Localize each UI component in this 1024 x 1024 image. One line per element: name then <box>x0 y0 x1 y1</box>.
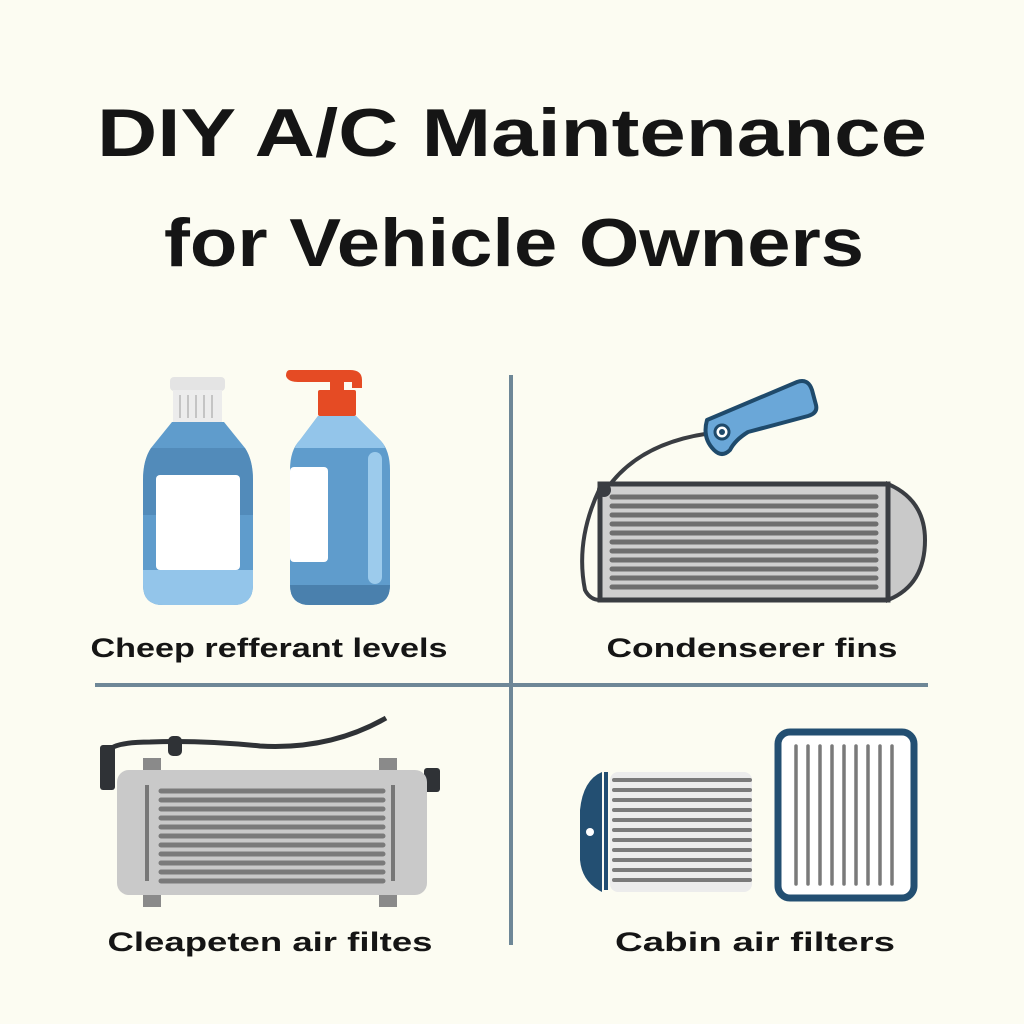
label: cabin filters: Cabin air filters <box>615 927 895 957</box>
icon: radiator body <box>100 745 440 907</box>
panel: radiator <box>100 718 440 907</box>
title: DIY A/C Maintenance <box>97 95 927 171</box>
label: condenser: Condenserer fins <box>606 633 898 663</box>
panel: cabin filters <box>580 732 914 898</box>
icon: condenser body <box>582 483 925 600</box>
title <box>97 95 927 281</box>
divider horizontal <box>95 683 928 687</box>
icon: panel filter <box>778 732 914 898</box>
icon: nozzle <box>706 381 816 454</box>
divider vertical <box>509 375 513 945</box>
panel: refrigerant bottles <box>143 370 390 605</box>
label: refrigerant: Cheep refferant levels <box>90 633 448 663</box>
icon: hose <box>606 432 720 490</box>
title: for Vehicle Owners <box>164 205 864 281</box>
icon: bottle with white cap <box>143 377 253 605</box>
icon: pump bottle <box>286 370 390 605</box>
label: radiator: Cleapeten air filtes <box>108 927 432 957</box>
icon: cylindrical filter <box>580 772 752 892</box>
panel: condenser <box>582 381 925 600</box>
icon: radiator hose <box>108 718 386 752</box>
